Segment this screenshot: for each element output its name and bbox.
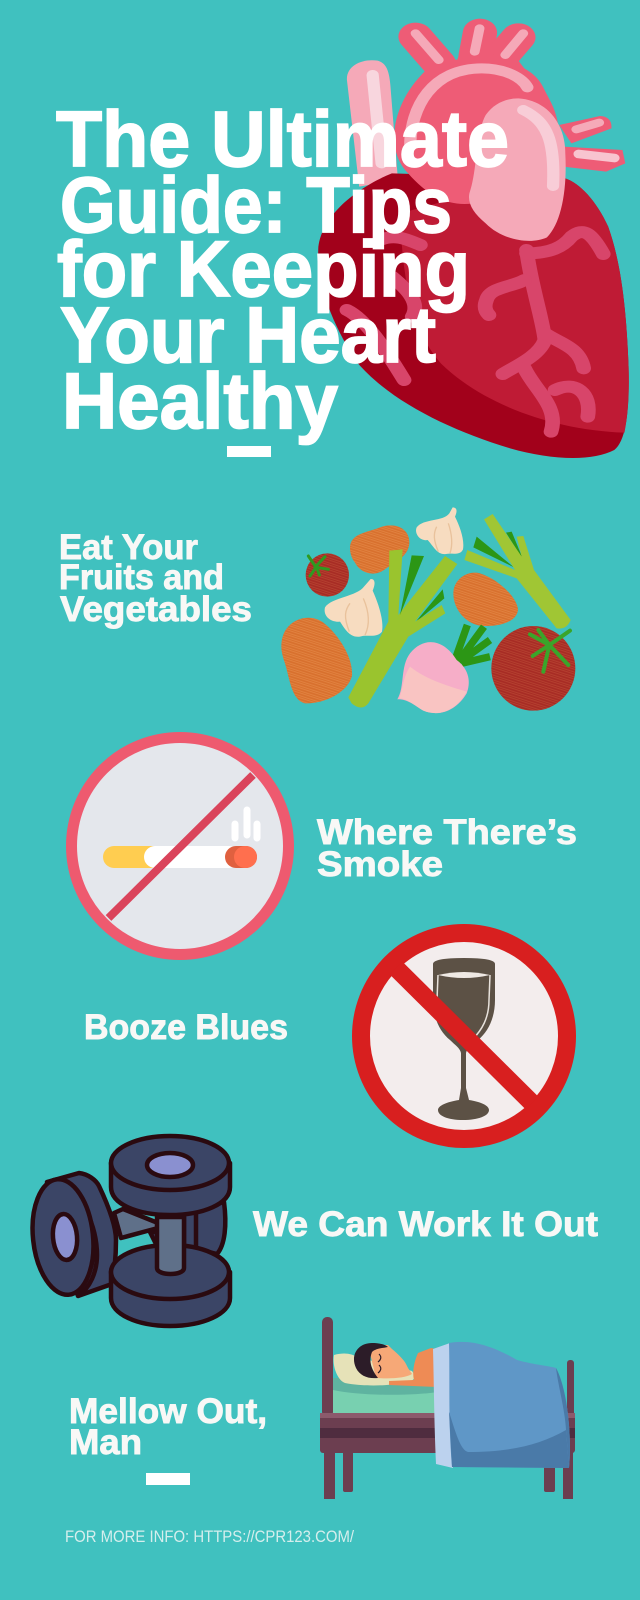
hair <box>354 1343 388 1378</box>
heart body <box>318 173 629 458</box>
heading: fruits and vegetables <box>59 527 252 629</box>
heading: mellow out: Mellow Out, <box>69 1391 267 1431</box>
illustration: vegetables <box>281 507 575 713</box>
arm and shoulder <box>389 1348 444 1387</box>
closing dash <box>146 1473 190 1485</box>
title dash <box>227 446 271 457</box>
leek right <box>464 514 571 629</box>
garlic middle <box>325 579 382 637</box>
potato middle <box>453 573 518 626</box>
coronary arteries <box>347 232 603 432</box>
centre handle <box>157 1217 184 1274</box>
slash <box>108 775 253 918</box>
icon: no smoking <box>72 738 288 954</box>
left weight side <box>47 1173 116 1296</box>
blanket <box>449 1342 570 1468</box>
heading: mellow out: Man <box>69 1422 142 1462</box>
cigarette <box>103 846 163 868</box>
icon: anatomical heart <box>318 28 629 458</box>
heading: fruits and vegetables: Eat Your <box>59 527 198 567</box>
right post and far legs <box>544 1465 555 1492</box>
bottom weight <box>111 1272 230 1326</box>
back right weight <box>184 1202 225 1254</box>
heading: fruits and vegetables: Vegetables <box>60 589 252 629</box>
legs <box>324 1450 335 1499</box>
heading: smoke: Smoke <box>317 844 443 884</box>
headboard post <box>322 1317 333 1417</box>
heading: smoke <box>317 812 577 884</box>
title: Guide: Tips <box>60 160 452 249</box>
mattress <box>333 1378 438 1414</box>
heart lighter region <box>400 178 629 433</box>
wine glass <box>433 958 495 1120</box>
smoke <box>235 810 257 838</box>
title: for Keeping <box>57 224 470 313</box>
big tomato <box>491 626 575 711</box>
title <box>56 94 509 445</box>
illustration: man sleeping in bed <box>320 1317 575 1499</box>
bed frame <box>320 1413 575 1453</box>
heading: booze: Booze Blues <box>84 1007 288 1047</box>
potato top <box>350 525 409 574</box>
leek centre <box>348 549 457 707</box>
right chamber <box>469 98 566 241</box>
potato left <box>281 618 352 703</box>
top weight <box>111 1163 230 1215</box>
title: Your Heart <box>60 290 436 379</box>
icon: no alcohol <box>361 933 567 1139</box>
face <box>368 1345 412 1378</box>
aortic arch <box>394 58 559 204</box>
title: The Ultimate <box>56 94 509 183</box>
left weight face <box>27 1176 99 1298</box>
heading: fruits and vegetables: Fruits and <box>59 557 224 597</box>
footer: FOR MORE INFO: HTTPS://CPR123.COM/ <box>65 1527 354 1546</box>
heading: smoke: Where There’s <box>317 812 577 852</box>
right vessels <box>559 116 611 143</box>
pillow <box>334 1354 414 1385</box>
blanket band <box>433 1343 453 1468</box>
small tomato <box>306 553 349 597</box>
turnip <box>397 625 490 713</box>
icon: dumbbells <box>27 1136 230 1326</box>
left handle <box>114 1209 158 1238</box>
garlic top <box>416 507 463 554</box>
left pale vessel <box>347 60 398 187</box>
slash <box>396 968 532 1103</box>
heading: work out: We Can Work It Out <box>253 1204 598 1244</box>
title: Healthy <box>62 356 338 445</box>
heading: mellow out <box>69 1391 267 1462</box>
top vessels <box>416 33 518 63</box>
closed eyes <box>378 1354 381 1373</box>
sleeper <box>354 1343 444 1387</box>
